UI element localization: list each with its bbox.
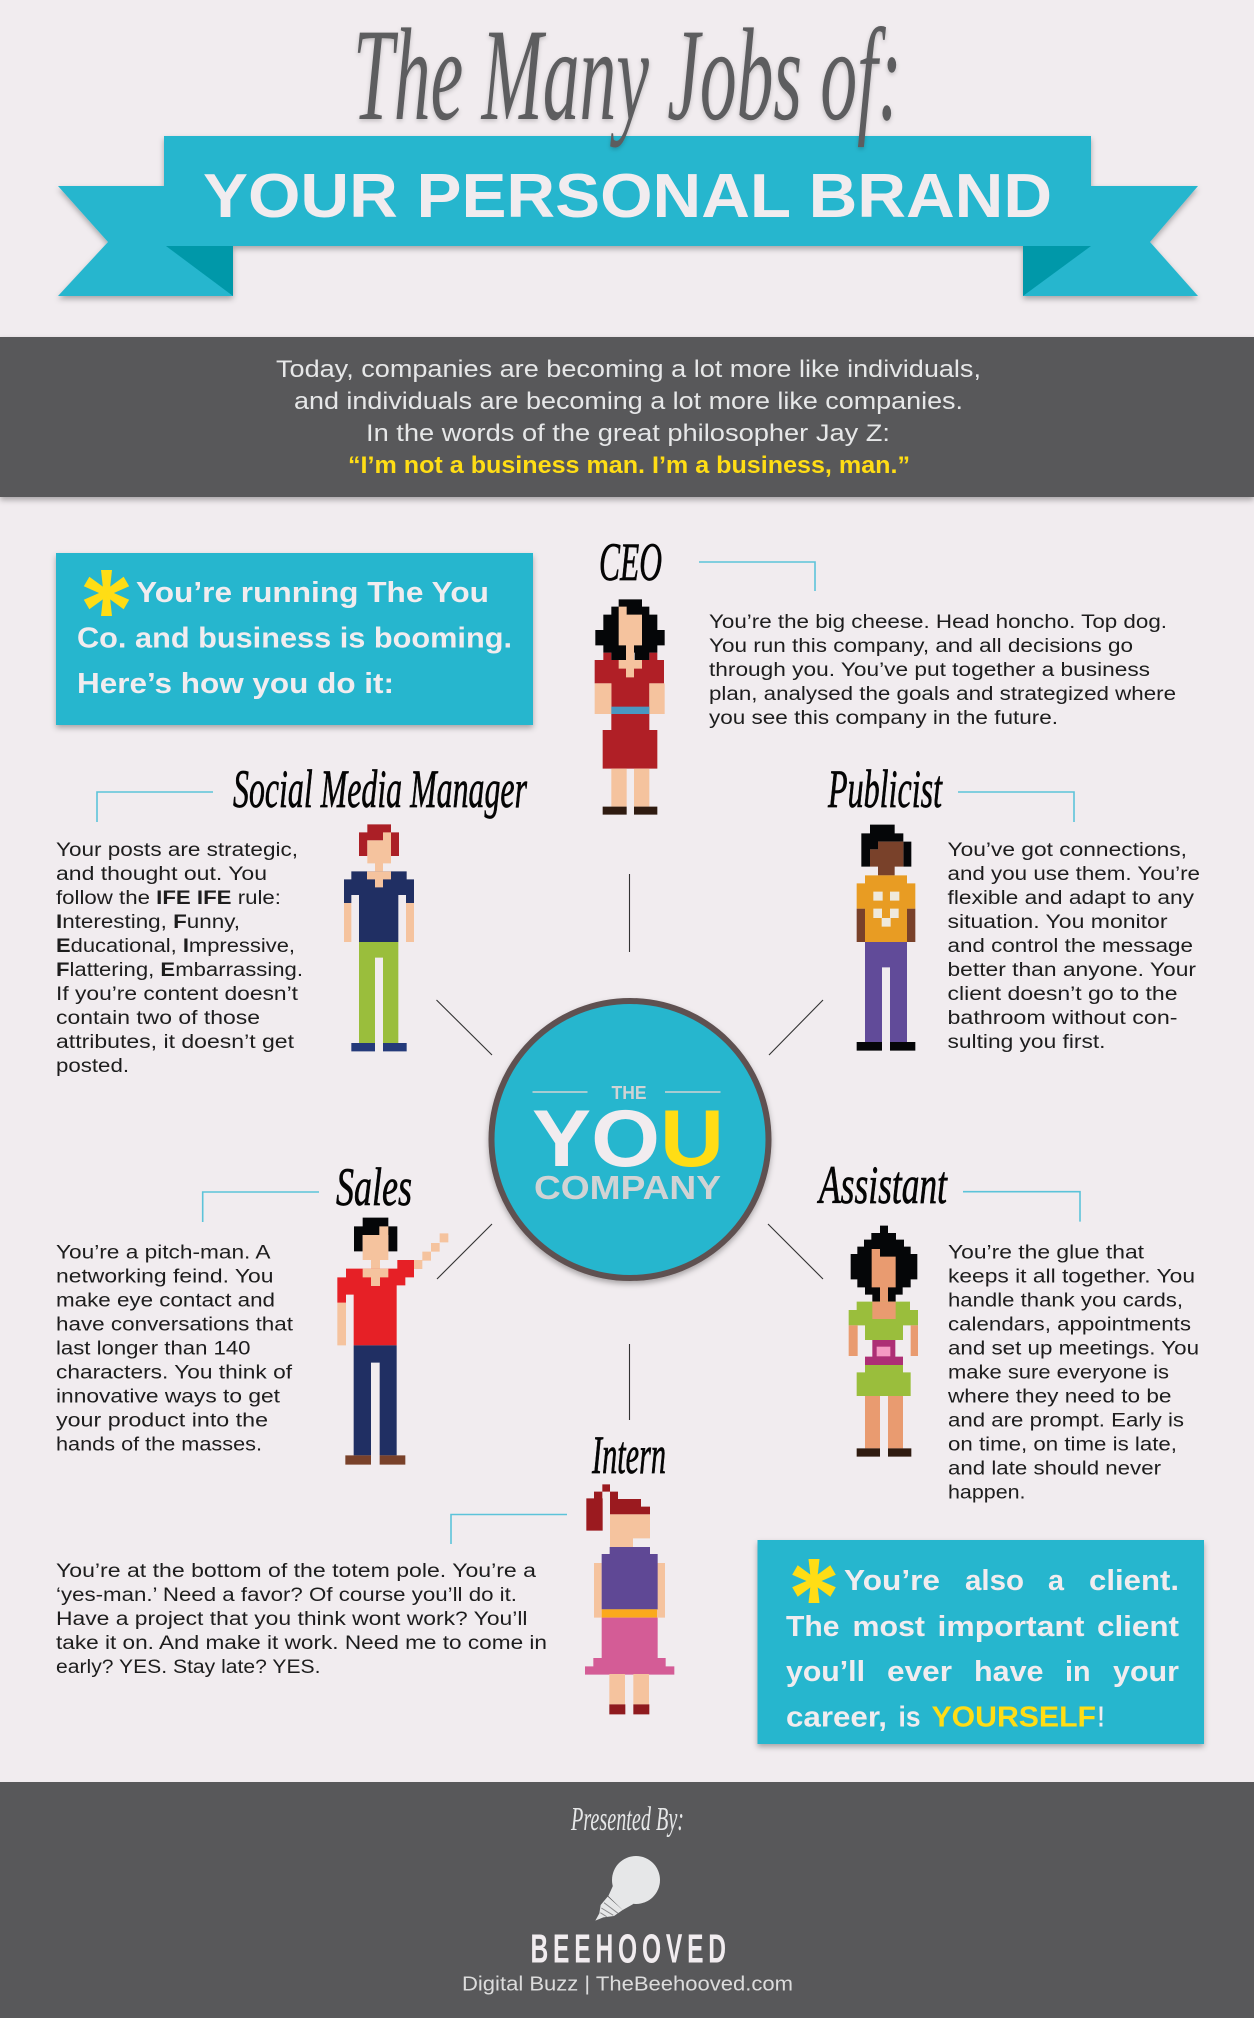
- callout text: Co. and business is booming.: [77, 622, 512, 654]
- description: [947, 1242, 1199, 1504]
- description: happen.: [948, 1482, 1026, 1504]
- description: You’re a pitch-man. A: [56, 1242, 271, 1264]
- description: You run this company, and all decisions go: [709, 636, 1133, 657]
- heading: Assistant: Assistant: [817, 1155, 948, 1215]
- intro text: Today, companies are becoming a lot more like individuals,: [276, 356, 981, 383]
- callout text: a: [1048, 1565, 1065, 1597]
- logo wordmark: BEEHOOVED: [530, 1926, 731, 1972]
- callout text: YOURSELF: [932, 1702, 1096, 1734]
- description: bathroom without con-: [948, 1008, 1178, 1029]
- description: You’re the glue that: [948, 1242, 1145, 1264]
- description: You’re at the bottom of the totem pole. You’re a: [56, 1561, 537, 1582]
- ribbon left tail: [58, 186, 233, 296]
- description: hands of the masses.: [56, 1434, 262, 1456]
- panel: CEO: [595, 532, 1176, 815]
- callout text: is: [898, 1702, 920, 1734]
- panel: Sales: [56, 1157, 448, 1465]
- callout text: You’re running The You: [136, 577, 489, 609]
- description: Educational, Impressive,: [56, 936, 295, 957]
- callout text: ever: [887, 1656, 952, 1688]
- badge rules: [532, 1091, 720, 1093]
- heading: Sales: Sales: [336, 1157, 412, 1217]
- callout text: Here’s how you do it:: [77, 668, 394, 700]
- callout text: also: [965, 1565, 1024, 1597]
- callout text: career,: [786, 1702, 887, 1734]
- description: characters. You think of: [56, 1362, 293, 1384]
- description: calendars, appointments: [948, 1314, 1191, 1336]
- description: sulting you first.: [948, 1032, 1106, 1053]
- description: take it on. And make it work. Need me to come in: [56, 1633, 547, 1654]
- description: on time, on time is late,: [948, 1434, 1177, 1456]
- description: through you. You’ve put together a business: [709, 660, 1150, 681]
- description: where they need to be: [947, 1386, 1172, 1408]
- connector: [958, 792, 1074, 822]
- description: your product into the: [56, 1410, 268, 1432]
- callout text: client: [1097, 1611, 1179, 1643]
- description: [56, 840, 303, 1077]
- connector: [97, 792, 213, 822]
- description: Your posts are strategic,: [56, 840, 298, 861]
- description: Flattering, Embarrassing.: [56, 960, 303, 981]
- badge: the: THE: [612, 1083, 646, 1103]
- description: networking feind. You: [56, 1266, 274, 1288]
- badge: company: COMPANY: [534, 1170, 721, 1207]
- badge: you: YOU: [532, 1094, 724, 1184]
- description: last longer than 140: [56, 1338, 250, 1360]
- ribbon main band: [164, 136, 1091, 246]
- description: better than anyone. Your: [948, 960, 1197, 981]
- description: and late should never: [948, 1458, 1162, 1480]
- heading: Intern: Intern: [591, 1425, 666, 1485]
- ribbon left fold: [166, 246, 233, 296]
- icon: asterisk: [84, 570, 129, 616]
- description: flexible and adapt to any: [948, 888, 1195, 909]
- panel: Social Media Manager: [56, 759, 528, 1077]
- description: keeps it all together. You: [948, 1266, 1195, 1288]
- callout text: client.: [1089, 1565, 1179, 1597]
- description: client doesn’t go to the: [948, 984, 1178, 1005]
- description: make sure everyone is: [948, 1362, 1169, 1384]
- connector: [699, 562, 815, 591]
- presented by: Presented By:: [570, 1801, 684, 1838]
- connector: [963, 1192, 1080, 1222]
- description: contain two of those: [56, 1008, 260, 1029]
- description: [948, 840, 1200, 1053]
- figure: social media manager: [344, 824, 414, 1051]
- description: ‘yes-man.’ Need a favor? Of course you’ll do it.: [56, 1585, 517, 1606]
- quote: “I’m not a business man. I’m a business, man.”: [348, 452, 910, 479]
- footer tagline: Digital Buzz | TheBeehooved.com: [462, 1974, 793, 1996]
- icon: light bulb: [595, 1856, 660, 1921]
- heading: Social Media Manager: Social Media Manager: [233, 759, 528, 819]
- callout text: have: [974, 1656, 1044, 1688]
- callout text: in: [1065, 1656, 1090, 1688]
- footer band: [0, 1782, 1254, 2018]
- description: follow the IFE IFE rule:: [56, 888, 281, 909]
- callout text: you’ll: [786, 1656, 865, 1688]
- icon: asterisk: [792, 1559, 836, 1603]
- callout box: [56, 553, 533, 725]
- ribbon banner: [58, 136, 1198, 296]
- description: Interesting, Funny,: [56, 912, 240, 933]
- description: you see this company in the future.: [709, 708, 1058, 729]
- description: and thought out. You: [56, 864, 267, 885]
- description: attributes, it doesn’t get: [56, 1032, 295, 1053]
- description: and set up meetings. You: [948, 1338, 1199, 1360]
- figure: sales: [337, 1218, 448, 1465]
- intro text: In the words of the great philosopher Jay Z:: [366, 420, 890, 447]
- description: make eye contact and: [56, 1290, 275, 1312]
- callout: also a client: [758, 1540, 1204, 1744]
- callout: running the you co: [56, 553, 533, 725]
- description: have conversations that: [56, 1314, 294, 1336]
- callout text: The: [786, 1611, 840, 1643]
- description: If you’re content doesn’t: [56, 984, 299, 1005]
- description: plan, analysed the goals and strategized where: [709, 684, 1176, 705]
- center badge: the you company: [492, 1001, 768, 1278]
- figure: assistant: [849, 1226, 918, 1457]
- callout text: important: [938, 1611, 1085, 1643]
- callout text: !: [1098, 1702, 1104, 1734]
- ribbon right tail: [1023, 186, 1198, 296]
- connector: [451, 1514, 567, 1544]
- callout text: [77, 577, 512, 700]
- description: and are prompt. Early is: [948, 1410, 1184, 1432]
- intro band background: [0, 337, 1254, 497]
- description: You’ve got connections,: [948, 840, 1187, 861]
- intro band: [0, 337, 1254, 497]
- description: early? YES. Stay late? YES.: [56, 1657, 320, 1678]
- description: handle thank you cards,: [948, 1290, 1183, 1312]
- panel: Intern: [56, 1425, 674, 1714]
- figure: intern: [585, 1484, 674, 1714]
- description: [56, 1242, 294, 1456]
- description: [56, 1561, 547, 1678]
- description: and you use them. You’re: [948, 864, 1200, 885]
- callout text: most: [852, 1611, 925, 1643]
- callout text: [786, 1565, 1179, 1734]
- heading: CEO: CEO: [599, 532, 662, 592]
- spoke lines: [436, 874, 823, 1420]
- callout box: [758, 1540, 1204, 1744]
- footer: [0, 1782, 1254, 2018]
- callout text: You’re: [844, 1565, 940, 1597]
- ribbon right fold: [1023, 246, 1091, 296]
- description: [709, 612, 1176, 729]
- panel: Publicist: [827, 759, 1200, 1053]
- description: situation. You monitor: [948, 912, 1168, 933]
- figure: CEO: [595, 599, 665, 815]
- callout text: your: [1113, 1656, 1179, 1688]
- description: You’re the big cheese. Head honcho. Top dog.: [709, 612, 1167, 633]
- panel: Assistant: [817, 1155, 1199, 1504]
- description: Have a project that you think wont work? You’ll: [56, 1609, 528, 1630]
- badge circle: [492, 1001, 768, 1278]
- connector: [203, 1192, 319, 1222]
- description: innovative ways to get: [56, 1386, 281, 1408]
- heading: Publicist: Publicist: [827, 759, 943, 819]
- intro text: [276, 356, 981, 447]
- banner heading: YOUR PERSONAL BRAND: [203, 162, 1052, 231]
- description: posted.: [56, 1056, 129, 1077]
- figure: publicist: [857, 825, 915, 1051]
- description: and control the message: [948, 936, 1193, 957]
- intro text: and individuals are becoming a lot more like companies.: [294, 388, 963, 415]
